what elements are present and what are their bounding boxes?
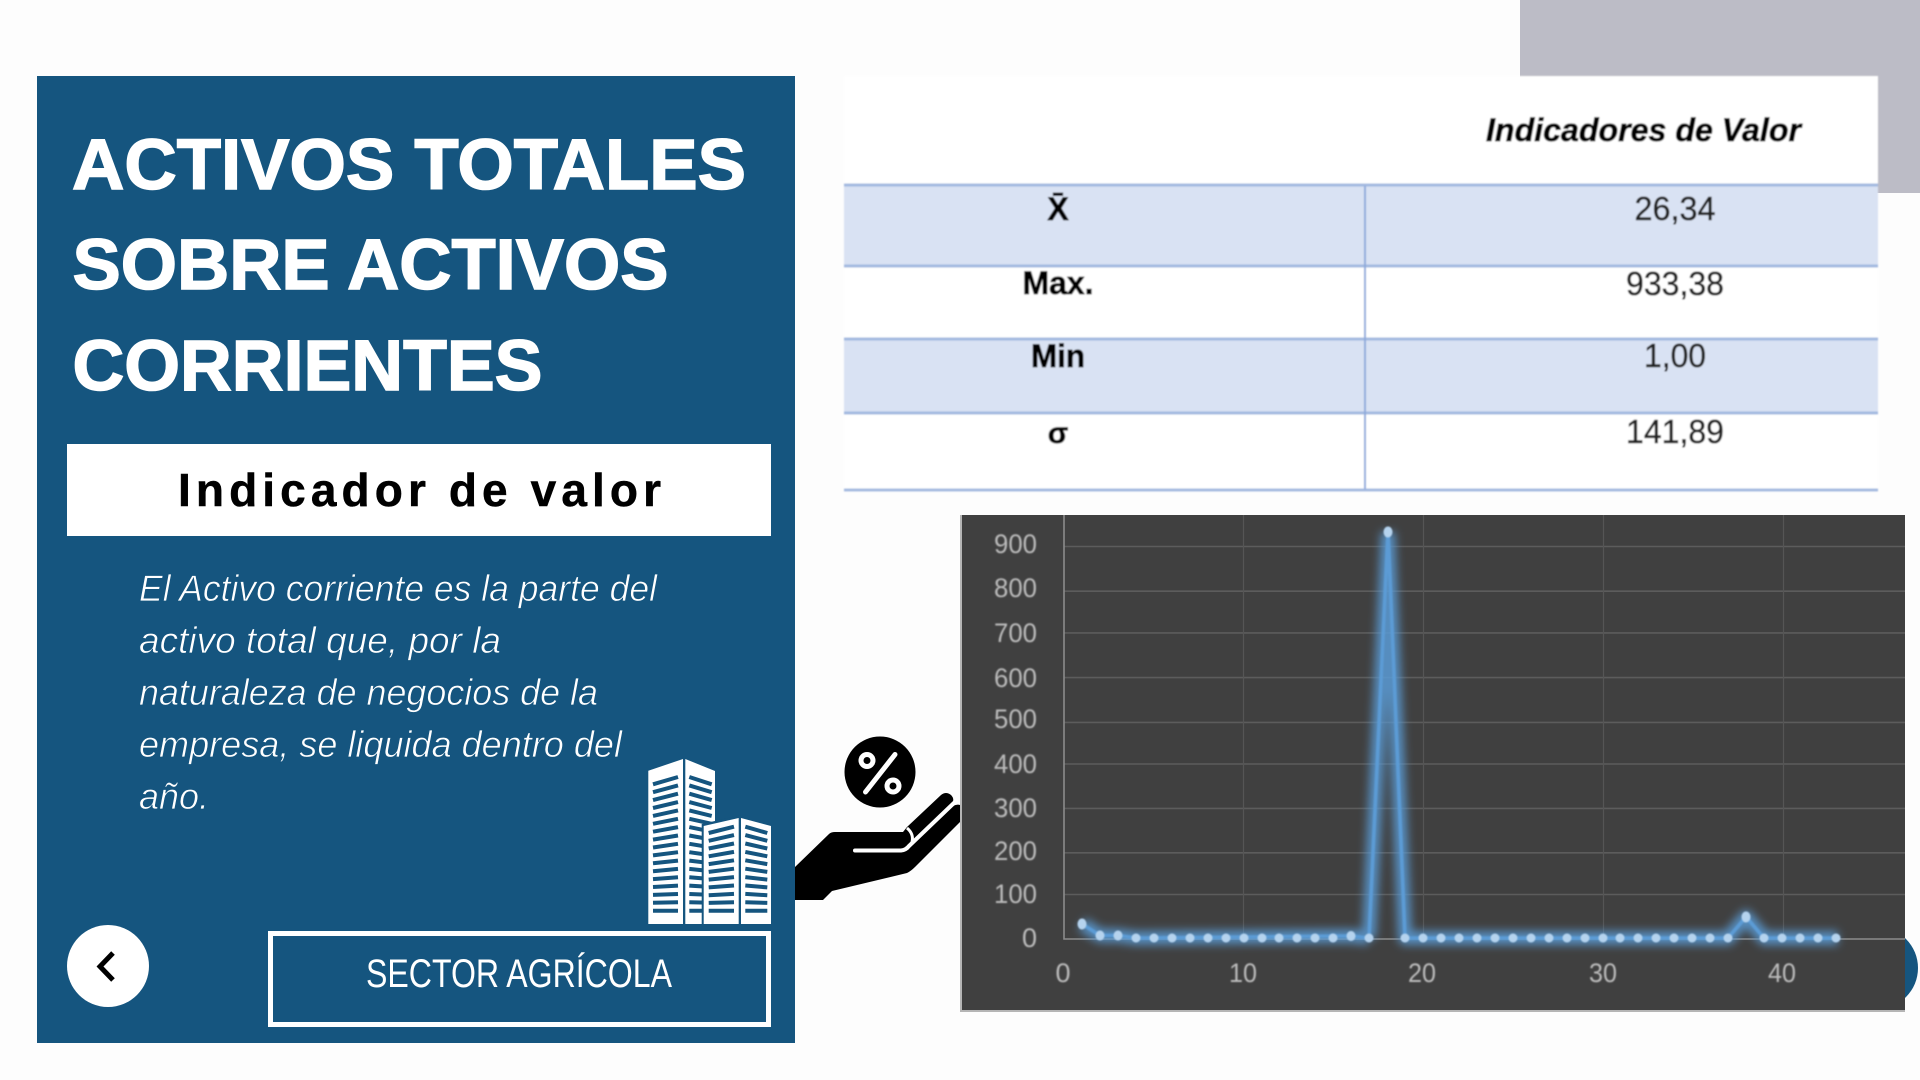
row values: 933,38 xyxy=(1626,265,1724,302)
title: ACTIVOS TOTALES xyxy=(72,126,746,205)
row labels: Min xyxy=(1031,338,1085,374)
data series line xyxy=(1082,532,1838,938)
y axis labels xyxy=(994,529,1037,953)
table header: Indicadores de Valor xyxy=(1486,112,1803,148)
description text xyxy=(139,568,659,817)
row values xyxy=(1626,190,1724,450)
description text: empresa, se liquida dentro del xyxy=(139,724,624,765)
y axis labels: 600 xyxy=(994,663,1037,693)
x axis labels: 20 xyxy=(1408,958,1436,988)
data series glow xyxy=(1082,532,1838,938)
blue circle behind chart xyxy=(1836,927,1918,1009)
x axis labels: 0 xyxy=(1055,958,1071,988)
back button xyxy=(67,925,149,1007)
title xyxy=(72,126,746,406)
x axis labels: 10 xyxy=(1229,958,1257,988)
y axis labels: 500 xyxy=(994,704,1037,734)
icon: hand holding percent xyxy=(795,736,960,900)
icon: office buildings xyxy=(648,759,771,924)
row values: 1,00 xyxy=(1644,337,1706,374)
description text: activo total que, por la xyxy=(139,620,501,661)
y axis labels: 200 xyxy=(994,836,1037,866)
y axis labels: 700 xyxy=(994,618,1037,648)
subtitle banner xyxy=(67,444,771,536)
line chart xyxy=(961,515,1905,1011)
y axis labels: 900 xyxy=(994,529,1037,559)
data points xyxy=(1078,526,1840,942)
description text: año. xyxy=(139,776,209,817)
y axis labels: 100 xyxy=(994,879,1037,909)
x axis labels: 40 xyxy=(1768,958,1796,988)
panel: indicator description xyxy=(37,76,795,1043)
row labels: σ xyxy=(1048,417,1068,450)
subtitle banner: Indicador de valor xyxy=(178,464,661,516)
sector label: SECTOR AGRÍCOLA xyxy=(366,951,672,996)
table: value indicators xyxy=(844,76,1878,492)
title: CORRIENTES xyxy=(72,327,542,406)
title: SOBRE ACTIVOS xyxy=(72,226,668,305)
y axis labels: 0 xyxy=(1022,923,1037,953)
description text: naturaleza de negocios de la xyxy=(139,672,598,713)
y axis labels: 400 xyxy=(994,749,1037,779)
x axis labels xyxy=(1055,958,1796,988)
y axis labels: 300 xyxy=(994,793,1037,823)
row labels: Max. xyxy=(1022,265,1094,301)
sector label xyxy=(270,934,768,1024)
y axis labels: 800 xyxy=(994,573,1037,603)
decorative grey block xyxy=(1520,0,1920,193)
row labels: X̄ xyxy=(1047,191,1069,227)
description text: El Activo corriente es la parte del xyxy=(139,568,659,609)
row labels xyxy=(1022,191,1094,450)
row values: 26,34 xyxy=(1634,190,1716,227)
row values: 141,89 xyxy=(1626,413,1724,450)
x axis labels: 30 xyxy=(1589,958,1617,988)
